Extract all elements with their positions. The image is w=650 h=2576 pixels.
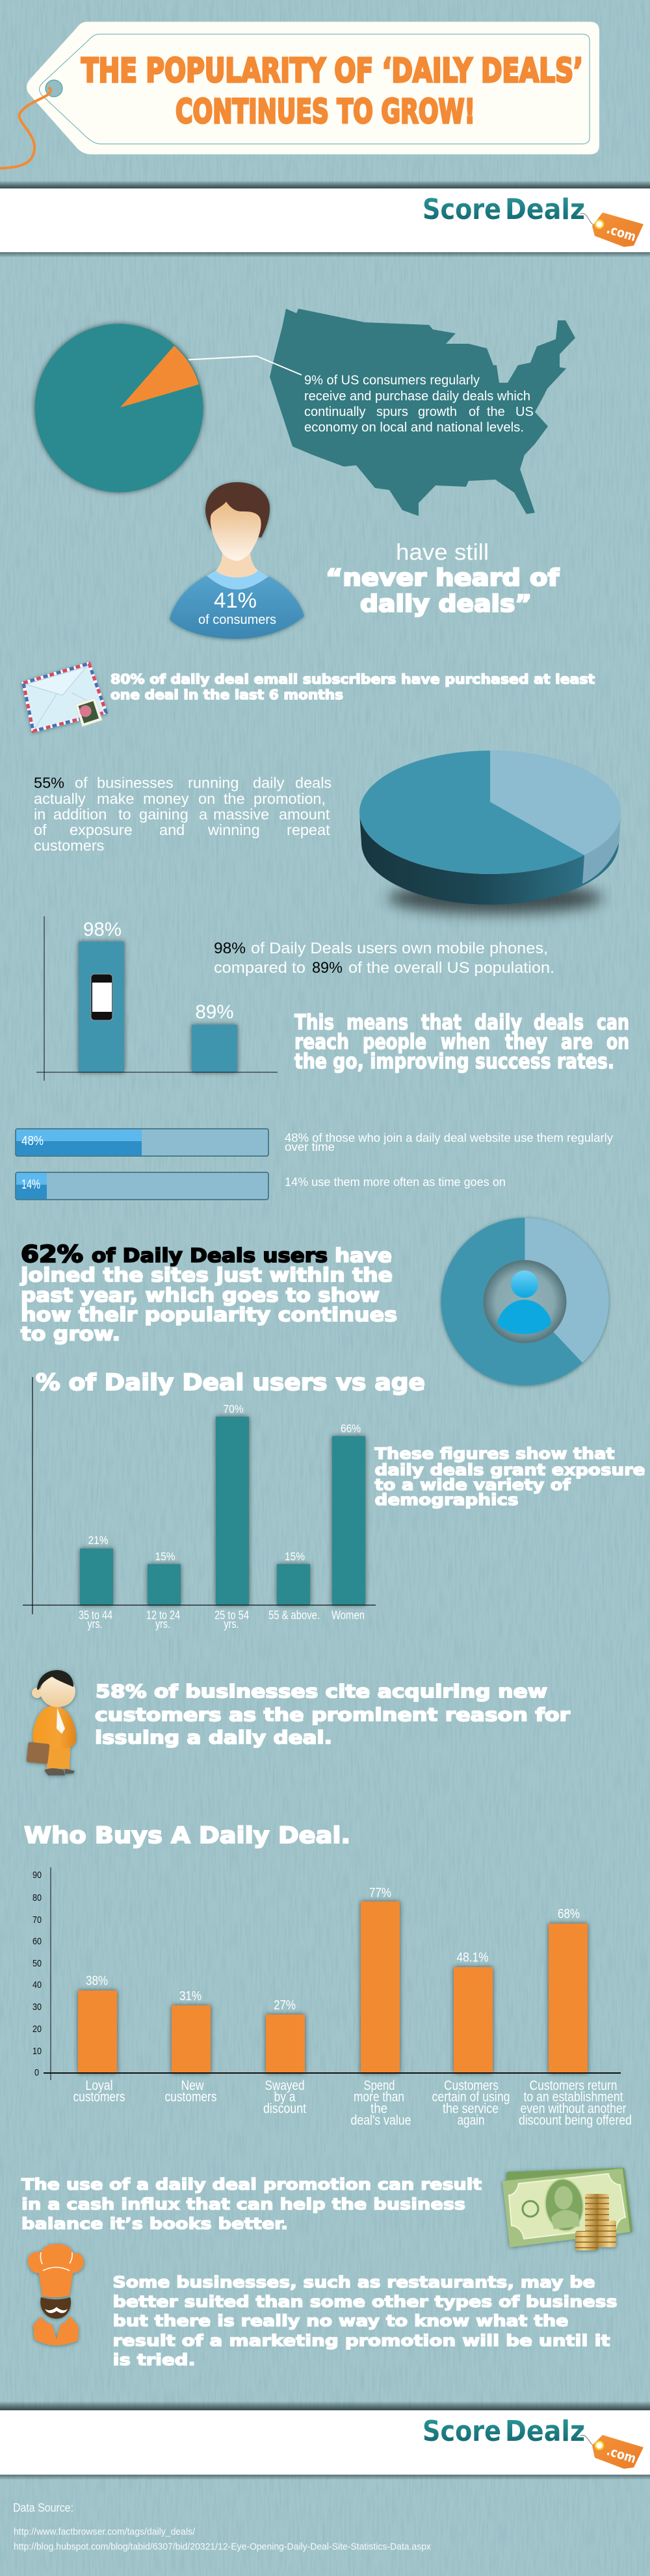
progress captions: 48% of those who join a daily deal website use them regularly: [285, 1131, 613, 1144]
demographics text: demographics: [374, 1491, 519, 1509]
success rates text: can: [597, 1010, 629, 1035]
logo wordmark: Score: [422, 193, 501, 226]
bar labels: [79, 1609, 365, 1630]
bar labels: yrs.: [155, 1617, 170, 1630]
progress captions: [285, 1131, 613, 1189]
bar labels: to an establishment: [524, 2090, 623, 2104]
data sources: [13, 2501, 431, 2553]
pie chart: [35, 324, 203, 493]
paragraph: money: [143, 790, 189, 807]
reason text: [95, 1681, 570, 1748]
y axis labels: 60: [32, 1936, 42, 1947]
email text: [110, 671, 595, 702]
bar labels: yrs.: [224, 1617, 239, 1630]
y axis labels: 30: [32, 2002, 42, 2013]
demographics text: These figures show that: [374, 1445, 615, 1463]
progress captions: over time: [285, 1140, 335, 1153]
success rates text: [294, 1010, 629, 1074]
y axis labels: 0: [34, 2067, 39, 2078]
paragraph: in: [34, 806, 46, 823]
paragraph: promotion,: [254, 790, 326, 807]
tag shape: [27, 22, 599, 155]
panel: 55 percent of businesses: [34, 751, 621, 914]
cash text: [21, 2176, 482, 2233]
panel: who buys a daily deal: [24, 1823, 632, 2128]
leader line: [188, 356, 302, 375]
bar values: 21%: [88, 1534, 108, 1547]
y axis labels: 70: [32, 1914, 42, 1926]
bar labels: 25 to 54: [214, 1609, 249, 1622]
bar labels: again: [458, 2113, 485, 2128]
paragraph: have: [335, 1244, 392, 1267]
phone text: of the overall US population.: [348, 959, 554, 977]
never heard quote: “never heard of: [326, 565, 559, 591]
y axis labels: 80: [32, 1892, 42, 1903]
bar labels: Women: [332, 1609, 365, 1622]
bar labels: 55 & above.: [268, 1609, 320, 1622]
paragraph: running: [188, 775, 239, 792]
logo wordmark: [422, 193, 585, 226]
footer logo wordmark: [422, 2415, 585, 2448]
progress bar 48 percent: 48%: [21, 1134, 44, 1148]
bar value: 89 percent: 89%: [195, 1001, 234, 1023]
bar values: 48.1%: [456, 1951, 489, 1965]
paragraph: addition: [53, 806, 107, 823]
email text: one deal in the last 6 months: [110, 687, 343, 702]
have still text: have still: [396, 539, 489, 565]
tag hole: [46, 80, 62, 97]
coins: [575, 2194, 616, 2250]
bar labels: certain of using: [432, 2090, 510, 2104]
panel: cash influx: [21, 2170, 630, 2250]
map text: growth: [418, 405, 457, 419]
restaurants text: Some businesses, such as restaurants, may be: [113, 2273, 595, 2291]
bar values: 27%: [274, 1998, 296, 2013]
panel: 58 percent of businesses: [26, 1670, 570, 1775]
reason text: customers as the prominent reason for: [95, 1704, 570, 1725]
paragraph: gaining: [139, 806, 188, 823]
icon: phone: [91, 974, 112, 1020]
bar labels: Spend: [364, 2078, 395, 2093]
email text: 80% of daily deal email subscribers have purchased at least: [110, 671, 595, 687]
paragraph: how their popularity continues: [21, 1304, 397, 1326]
y axis labels: [32, 1870, 42, 2078]
logo wordmark: Dealz: [505, 193, 585, 226]
bar labels: customers: [165, 2090, 217, 2104]
restaurants text: better suited than some other types of business: [113, 2293, 618, 2311]
progress bar 14 percent: 14%: [21, 1178, 40, 1192]
bar chart: [36, 916, 278, 1081]
paragraph: [20, 1241, 397, 1345]
success rates text: they: [505, 1029, 547, 1054]
y axis labels: 20: [32, 2024, 42, 2035]
bar values: 15%: [155, 1550, 176, 1563]
bar labels: customers: [73, 2090, 125, 2104]
map text: economy on local and national levels.: [304, 420, 524, 435]
paragraph: deals: [295, 775, 332, 792]
footer logo wordmark: Score: [422, 2415, 501, 2448]
paragraph: on: [198, 790, 215, 807]
demographics text: to a wide variety of: [374, 1476, 571, 1494]
map text: of: [469, 405, 480, 419]
chart title: % of Daily Deal users vs age: [36, 1370, 425, 1396]
footer logo wordmark: Dealz: [505, 2415, 585, 2448]
data sources: Data Source:: [13, 2501, 73, 2514]
paragraph: [34, 775, 332, 854]
data sources: http://www.factbrowser.com/tags/daily_deals/: [14, 2527, 196, 2537]
bar labels: 35 to 44: [79, 1609, 112, 1622]
paragraph: of: [75, 775, 88, 792]
paragraph: exposure: [70, 821, 133, 838]
paragraph: to: [118, 806, 131, 823]
bar values: 38%: [86, 1974, 108, 1989]
paragraph: customers: [34, 837, 104, 854]
bar labels: yrs.: [87, 1617, 103, 1630]
restaurants text: result of a marketing promotion will be until it: [113, 2332, 610, 2350]
panel: users vs age chart: [23, 1370, 645, 1630]
paragraph: massive: [213, 806, 269, 823]
demographics text: daily deals grant exposure: [374, 1461, 645, 1479]
paragraph: make: [97, 790, 134, 807]
title tag: [0, 22, 599, 168]
restaurants text: is tried.: [113, 2351, 195, 2369]
panel: mobile phones: [36, 916, 629, 1081]
paragraph: winning: [207, 821, 260, 838]
bar labels: even without another: [520, 2102, 627, 2116]
map text: continually: [304, 405, 366, 419]
demographics text: [374, 1445, 645, 1509]
success rates text: on: [606, 1029, 629, 1054]
paragraph: joined the sites just within the: [20, 1264, 393, 1286]
cash text: The use of a daily deal promotion can result: [21, 2176, 482, 2194]
map text: spurs: [376, 405, 408, 419]
map text: receive and purchase daily deals which: [304, 389, 530, 404]
phone text: [214, 940, 554, 977]
paragraph: of Daily Deals users: [92, 1244, 328, 1267]
paragraph: of: [34, 821, 47, 838]
y axis labels: 50: [32, 1958, 42, 1969]
bar labels: Loyal: [86, 2078, 113, 2093]
success rates text: when: [441, 1029, 490, 1054]
bar labels: Customers: [444, 2078, 499, 2093]
bar labels: discount: [263, 2102, 306, 2116]
phone text: 98%: [214, 940, 246, 957]
progress bar 48 percent: [16, 1129, 268, 1156]
bar values: [88, 1402, 361, 1563]
map text: US: [515, 405, 534, 419]
bar chart: [32, 1868, 632, 2128]
footer logo tag: .com: [605, 2443, 638, 2466]
never heard quote: [326, 565, 559, 617]
logo tag: .com: [605, 221, 638, 244]
icon: money: [504, 2170, 630, 2250]
cash text: in a cash influx that can help the business: [21, 2195, 465, 2213]
icon: user: [497, 1270, 551, 1334]
3D pie chart: [359, 751, 621, 914]
data sources: http://blog.hubspot.com/blog/tabid/6307/bid/20321/12-Eye-Opening-Daily-Deal-Site-Statistics-Data.aspx: [14, 2541, 431, 2553]
success rates text: means: [346, 1010, 408, 1035]
map text: [304, 373, 534, 435]
bar labels: by a: [274, 2090, 296, 2104]
map text: the: [487, 405, 505, 419]
success rates text: are: [561, 1029, 593, 1054]
paragraph: businesses: [97, 775, 174, 792]
bar labels: Swayed: [265, 2078, 304, 2093]
bar labels: [73, 2078, 632, 2128]
bar values: 15%: [285, 1550, 305, 1563]
reason text: issuing a daily deal.: [95, 1727, 332, 1748]
success rates text: daily: [474, 1010, 522, 1035]
paragraph: 55%: [34, 775, 64, 792]
header band with logo: [0, 181, 650, 257]
footer logo tag: [580, 2435, 644, 2469]
restaurants text: but there is really no way to know what the: [113, 2312, 568, 2330]
y axis labels: 40: [32, 1979, 42, 1990]
never heard quote: daily deals”: [360, 591, 532, 617]
tag inner border: [39, 34, 590, 144]
map text: 9% of US consumers regularly: [304, 373, 480, 387]
paragraph: and: [159, 821, 185, 838]
success rates text: people: [363, 1029, 426, 1054]
paragraph: 62%: [21, 1241, 83, 1268]
donut chart: [441, 1218, 609, 1385]
bar values: 77%: [369, 1886, 391, 1900]
consumer label: of consumers: [198, 613, 276, 627]
icon: businessman: [26, 1670, 76, 1775]
consumer percentage: 41%: [214, 588, 257, 612]
phone text: 89%: [312, 959, 343, 977]
title line 2: CONTINUES TO GROW!: [176, 93, 475, 131]
bar labels: the: [370, 2102, 387, 2116]
icon: chef: [28, 2244, 84, 2345]
footer band with logo: [0, 2401, 650, 2480]
bar chart: [23, 1377, 376, 1630]
phone text: of Daily Deals users own mobile phones,: [251, 940, 548, 957]
bar labels: more than: [354, 2090, 404, 2104]
y axis labels: 10: [32, 2046, 42, 2057]
bar labels: the service: [443, 2102, 499, 2116]
restaurants text: [113, 2273, 618, 2369]
map of the US: [270, 309, 575, 516]
panel: email subscribers: [22, 663, 595, 732]
success rates text: deals: [534, 1010, 584, 1035]
paragraph: a: [199, 806, 208, 823]
bar labels: Customers return: [529, 2078, 618, 2093]
paragraph: the: [224, 790, 245, 807]
tag string: [0, 88, 51, 168]
paragraph: past year, which goes to show: [21, 1284, 380, 1306]
panel: 9 percent of consumers: [35, 309, 575, 516]
bar value: 98 percent: 98%: [83, 919, 122, 940]
success rates text: reach: [294, 1029, 349, 1054]
success rates text: This: [294, 1010, 334, 1035]
bar values: 68%: [558, 1907, 580, 1921]
phone text: compared to: [214, 959, 306, 977]
paragraph: repeat: [287, 821, 330, 838]
reason text: 58% of businesses cite acquiring new: [96, 1681, 547, 1702]
bar labels: deal's value: [351, 2113, 411, 2128]
bar values: 66%: [341, 1422, 361, 1435]
logo tag: [580, 213, 644, 247]
bar values: 70%: [224, 1402, 243, 1415]
cash text: balance it’s books better.: [21, 2215, 288, 2233]
bar values: [86, 1886, 580, 2013]
paragraph: to grow.: [21, 1323, 120, 1345]
person icon: [170, 482, 304, 639]
panel: 62 percent joined: [20, 1218, 609, 1385]
panel: progress bars: [16, 1129, 613, 1200]
panel: 41 percent of consumers: [170, 482, 559, 639]
bar labels: 12 to 24: [146, 1609, 180, 1622]
icon: envelope: [22, 663, 107, 732]
paragraph: amount: [279, 806, 330, 823]
progress captions: 14% use them more often as time goes on: [285, 1176, 506, 1189]
y axis labels: 90: [32, 1870, 42, 1881]
panel: restaurants: [28, 2244, 618, 2369]
bar values: 31%: [179, 1989, 202, 2003]
bar labels: New: [181, 2078, 204, 2093]
chart title: Who Buys A Daily Deal.: [24, 1823, 350, 1849]
paragraph: daily: [253, 775, 285, 792]
stamp: [75, 698, 102, 727]
paragraph: actually: [34, 790, 86, 807]
bar labels: discount being offered: [519, 2113, 632, 2128]
progress bar 14 percent: [16, 1172, 268, 1200]
success rates text: that: [421, 1010, 462, 1035]
